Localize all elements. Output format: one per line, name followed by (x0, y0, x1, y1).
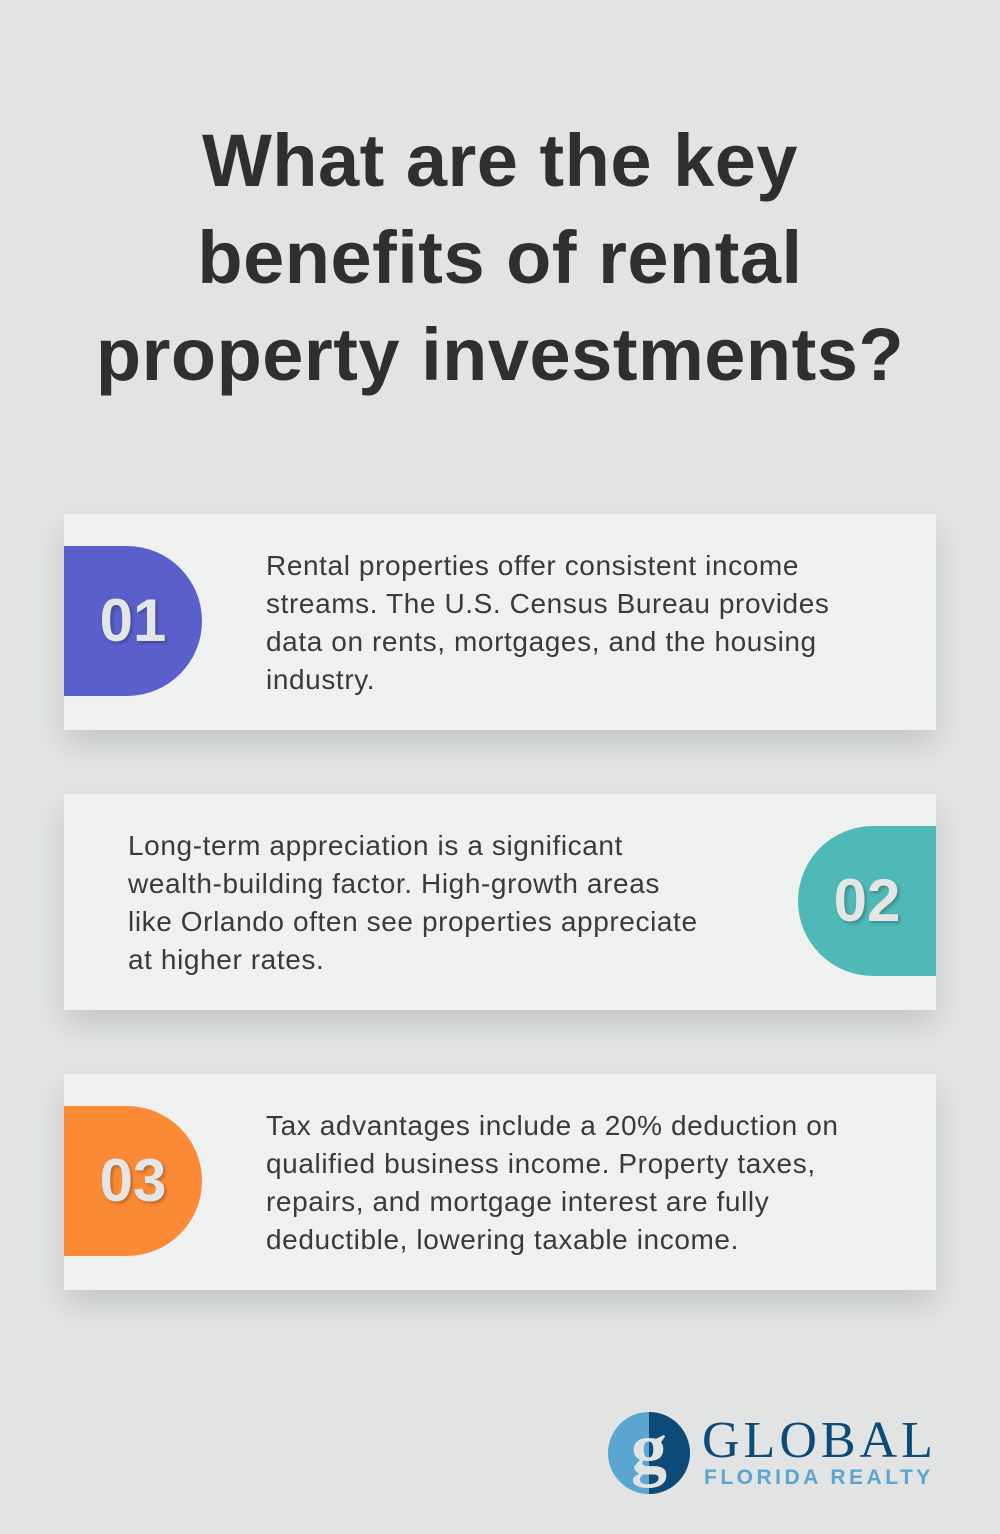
text 3: repairs, and mortgage interest are fully (266, 1186, 769, 1217)
title: property investments? (96, 313, 904, 396)
title: What are the key (202, 119, 798, 202)
text 1 (266, 550, 830, 695)
panel: card 1 (64, 514, 936, 730)
logo (608, 1412, 937, 1494)
text 2 (128, 830, 698, 975)
text 3: deductible, lowering taxable income. (266, 1224, 739, 1255)
text 3 (266, 1110, 839, 1255)
text 2: Long-term appreciation is a significant (128, 830, 623, 861)
title: benefits of rental (197, 216, 803, 299)
panel: card 2 (64, 794, 936, 1010)
text 3: qualified business income. Property taxes, (266, 1148, 816, 1179)
title (96, 119, 904, 396)
badge 03 (64, 1106, 202, 1256)
text 1: streams. The U.S. Census Bureau provides (266, 588, 830, 619)
text 1: industry. (266, 664, 375, 695)
text 1: data on rents, mortgages, and the housing (266, 626, 817, 657)
badge 02 (798, 826, 936, 976)
badge 01: 01 (100, 587, 166, 654)
badge 03: 03 (100, 1147, 166, 1214)
text 2: at higher rates. (128, 944, 324, 975)
text 1: Rental properties offer consistent income (266, 550, 799, 581)
icon: g circle (608, 1412, 690, 1494)
panel: card 3 (64, 1074, 936, 1290)
logo: FLORIDA REALTY (704, 1466, 934, 1489)
logo text: GLOBAL (702, 1412, 937, 1469)
text 3: Tax advantages include a 20% deduction on (266, 1110, 839, 1141)
text 2: like Orlando often see properties appreciate (128, 906, 698, 937)
badge 02: 02 (834, 867, 900, 934)
text 2: wealth-building factor. High-growth areas (128, 868, 660, 899)
badge 01 (64, 546, 202, 696)
